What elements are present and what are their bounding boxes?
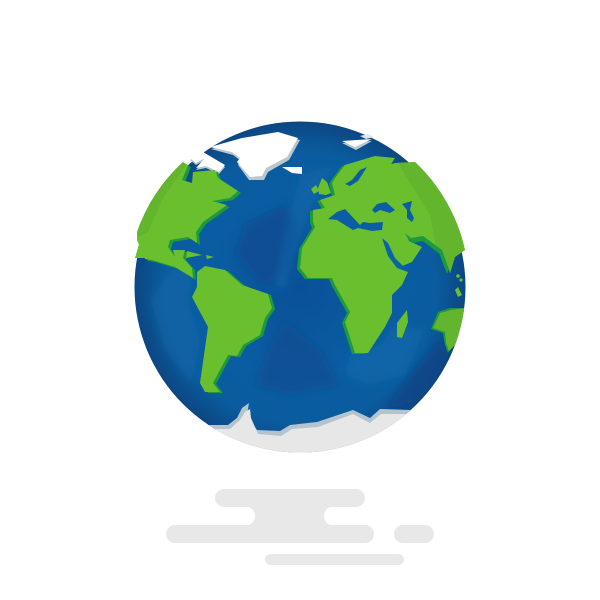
globe (134, 121, 466, 470)
western band on north america (137, 162, 186, 237)
caspian sea (402, 201, 414, 222)
italy (347, 203, 361, 221)
north america (137, 162, 238, 278)
greenland (210, 132, 298, 177)
north america shadow (140, 164, 241, 280)
red sea (382, 238, 405, 268)
antarctica (209, 403, 410, 452)
ice sheet shadow (209, 403, 410, 452)
ice sheet (215, 409, 406, 452)
madagascar (397, 310, 408, 338)
arctic ice floe right (342, 134, 374, 150)
arctic ice floe centre (282, 167, 302, 174)
asia eastern band (398, 162, 465, 273)
ocean (134, 121, 466, 453)
mediterranean sea (328, 209, 383, 231)
ireland (311, 185, 319, 194)
great britain (318, 178, 331, 195)
south america shadow (195, 267, 275, 393)
indonesian islands (455, 274, 463, 297)
south america (192, 266, 272, 392)
greenland shadow (211, 135, 300, 180)
infographic: flat globe illustration (134, 122, 466, 565)
baltic sea (345, 167, 367, 186)
eurasia and africa (300, 156, 465, 353)
central america islands (135, 244, 214, 259)
arctic islands (190, 152, 225, 174)
eurasia and africa shadow (297, 157, 462, 354)
australia (431, 308, 466, 353)
small cloud pill (394, 525, 434, 543)
cloud shadow under globe (166, 489, 434, 565)
upper and middle cloud band (166, 489, 374, 543)
black sea (372, 202, 395, 213)
arabian coast shadow (405, 233, 450, 272)
lower cloud pill (265, 554, 404, 565)
